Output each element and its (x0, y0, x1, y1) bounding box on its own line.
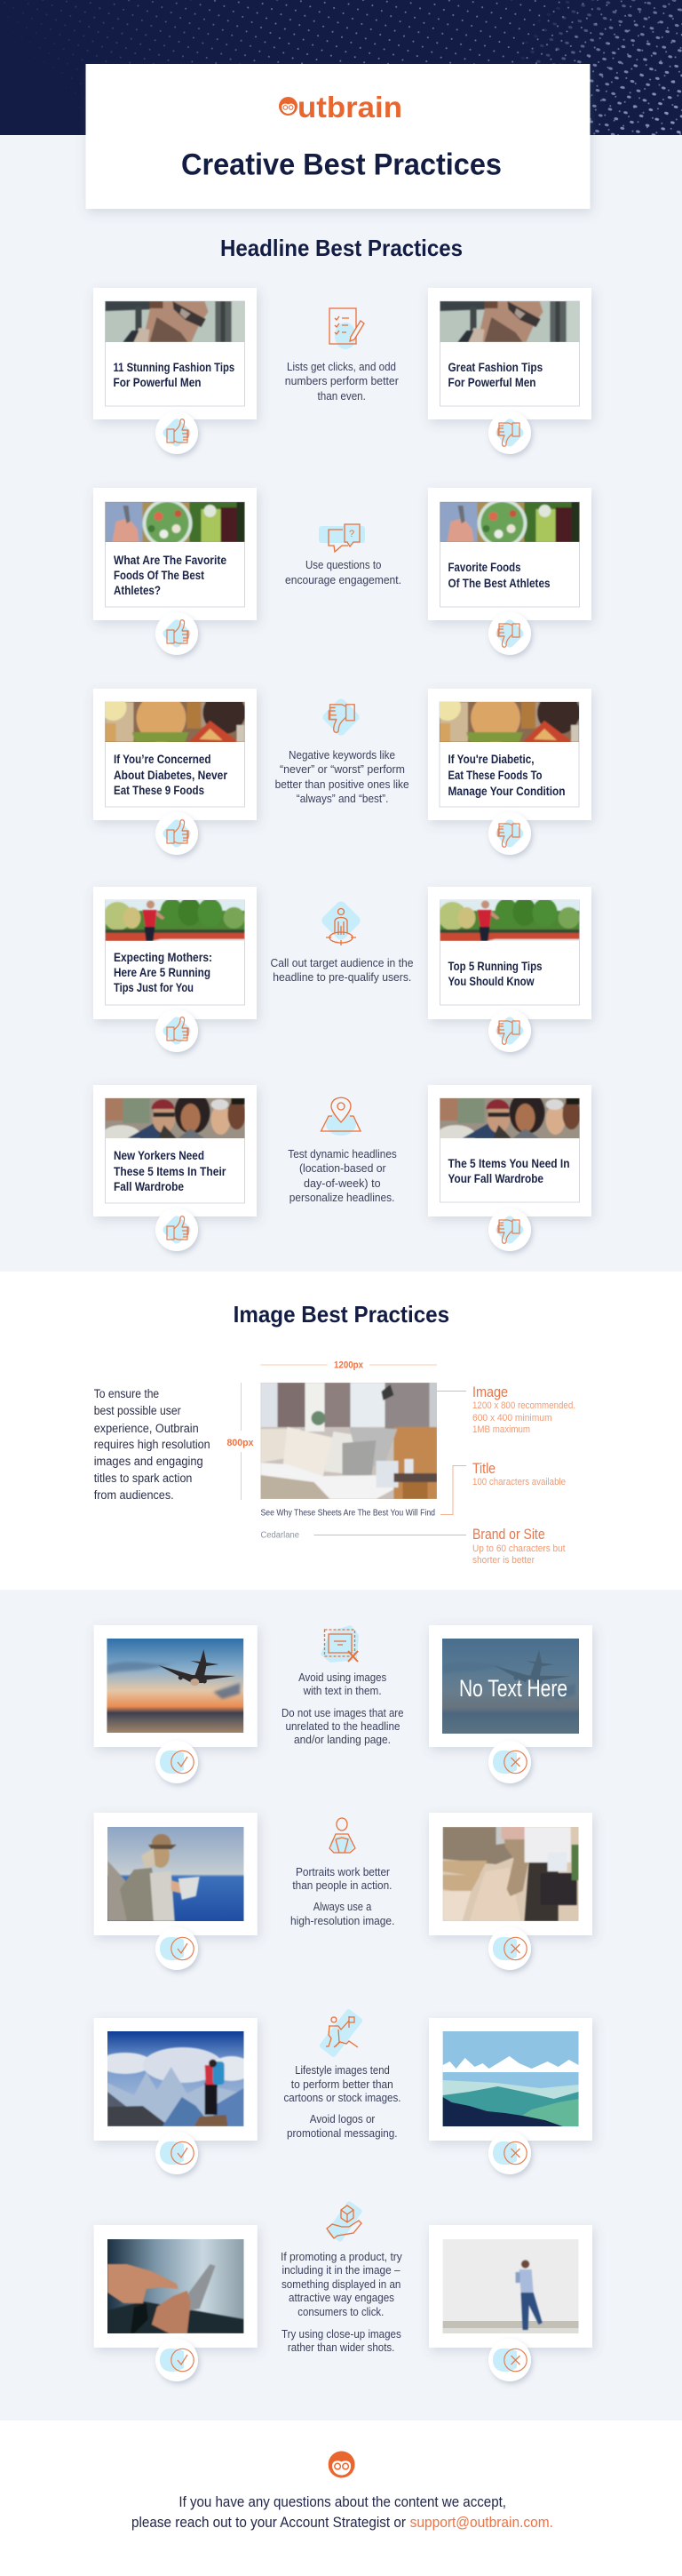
intro text: titles to spark action (94, 1471, 192, 1485)
card: good headline (93, 689, 257, 820)
tip text: (location-based or (299, 1162, 386, 1175)
icon: map pin (321, 1097, 361, 1136)
card: good headline: What Are The Favorite (114, 553, 226, 567)
icon: thumbs up (155, 411, 198, 454)
card: good headline: Expecting Mothers: (114, 950, 212, 964)
card: good headline (93, 1085, 257, 1216)
tip text: day-of-week) to (304, 1177, 381, 1190)
tip text: Lifestyle images tend (295, 2064, 390, 2077)
icon: thumbs up (155, 812, 198, 855)
intro text: images and engaging (94, 1455, 203, 1468)
tip text: Use questions to (305, 559, 381, 571)
card: good headline: New Yorkers Need (114, 1148, 204, 1162)
tip text (281, 2251, 403, 2354)
tip text: Call out target audience in the (270, 957, 414, 969)
footer text (131, 2493, 553, 2531)
panel: image row 1 (94, 1625, 592, 1783)
icon: check (155, 2339, 198, 2381)
heading: headline best practices: Headline Best Practices (220, 235, 463, 261)
intro text: requires high resolution (94, 1438, 210, 1451)
tip text: encourage engagement. (285, 574, 401, 586)
panel: image row 2 (94, 1813, 592, 1970)
card: good image (94, 1625, 258, 1747)
card: weak headline: Great Fashion Tips (448, 360, 543, 374)
card: good image (94, 2225, 258, 2348)
tip text: to perform better than (291, 2078, 393, 2091)
icon: thumbs down (488, 812, 531, 855)
tip text: unrelated to the headline (286, 1720, 400, 1733)
card: good headline: These 5 Items In Their (114, 1164, 226, 1178)
intro text: best possible user (94, 1404, 181, 1417)
panel: headline row 5 (93, 1085, 591, 1251)
caption: title: See Why These Sheets Are The Best You Will Find (261, 1509, 435, 1518)
panel: headline row 3 (93, 689, 591, 855)
tip text (290, 1866, 394, 1927)
title card (85, 64, 590, 209)
panel: headline row 4 (93, 887, 591, 1052)
card: bad image with text: No Text Here (459, 1675, 567, 1702)
tip text: personalize headlines. (289, 1192, 394, 1204)
tip text: attractive way engages (289, 2292, 394, 2304)
caption: brand: Cedarlane (261, 1530, 299, 1541)
card: good headline: Eat These 9 Foods (114, 783, 204, 797)
card: bad image wide shot (429, 2225, 592, 2348)
label: image: 1200 x 800 recommended. (472, 1400, 575, 1411)
card: good image (94, 1813, 258, 1935)
card: good headline: Fall Wardrobe (114, 1179, 184, 1193)
card: weak headline: If You're Diabetic, (448, 752, 535, 766)
icon: thumbs up (155, 1009, 198, 1052)
tip text (288, 1148, 397, 1204)
footer (0, 2420, 682, 2576)
card: weak headline (428, 887, 591, 1019)
card: good headline: 11 Stunning Fashion Tips (114, 360, 234, 374)
tip text: with text in them. (303, 1685, 382, 1697)
icon: checklist (329, 308, 364, 349)
label: image: 1MB maximum (472, 1424, 530, 1435)
dimension: 800px (227, 1383, 254, 1500)
card: weak headline: Manage Your Condition (448, 784, 565, 798)
tip text: numbers perform better (285, 375, 399, 387)
card: good headline: Foods Of The Best (114, 568, 204, 582)
card: weak headline: Your Fall Wardrobe (448, 1171, 543, 1185)
tip text: Negative keywords like (289, 749, 395, 762)
panel: headline row 2 (93, 488, 591, 655)
tip text: cartoons or stock images. (284, 2092, 401, 2104)
icon: check (155, 2132, 198, 2174)
tip text: than even. (318, 390, 366, 403)
icon: check (155, 1741, 198, 1783)
icon: thumbs down (488, 411, 531, 454)
card: good image (94, 2018, 258, 2141)
card: weak headline: The 5 Items You Need In (448, 1156, 570, 1170)
label: image: 600 x 400 minimum (472, 1413, 552, 1424)
tip text: better than positive ones like (275, 778, 409, 791)
card: good headline: Athletes? (114, 583, 161, 597)
label: brand or site: Up to 60 characters but (472, 1543, 565, 1554)
label: title (472, 1460, 566, 1487)
card: good headline: Here Are 5 Running (114, 965, 210, 979)
card: weak headline: Of The Best Athletes (448, 576, 551, 590)
tip text: Always use a (313, 1901, 371, 1913)
icon: thumbs up (155, 612, 198, 655)
photo: bedroom (261, 1383, 437, 1499)
tip text (285, 361, 399, 403)
icon: thumbs down (488, 612, 531, 655)
logo: Outbrain: utbrain (297, 91, 402, 124)
label: title: Title (472, 1460, 496, 1477)
footer text: If you have any questions about the content we accept, (178, 2493, 506, 2510)
card: weak headline: You Should Know (448, 974, 535, 988)
icon: thumbs down (488, 1208, 531, 1251)
icon: cross (488, 2132, 531, 2174)
panel: image specs section (0, 1272, 682, 1590)
intro text: experience, Outbrain (94, 1422, 199, 1435)
panel: image row 3 (94, 2008, 592, 2174)
tip text (275, 749, 409, 805)
icon: target audience (320, 899, 362, 945)
title: Creative Best Practices (181, 148, 502, 181)
card: good headline: If You’re Concerned (114, 752, 211, 766)
intro text (94, 1387, 210, 1502)
tip text (285, 559, 401, 586)
intro text: from audiences. (94, 1488, 174, 1502)
tip text: Lists get clicks, and odd (287, 361, 396, 373)
icon: Outbrain head (329, 2451, 355, 2477)
header band with dot pattern (0, 0, 682, 135)
dimension: 1200px: 1200px (334, 1360, 364, 1370)
icon: hiker with flag (319, 2008, 363, 2058)
card: good headline: For Powerful Men (114, 375, 201, 389)
tip text: “never” or “worst” perform (280, 763, 405, 776)
label: image: Image (472, 1384, 508, 1400)
tip text: Test dynamic headlines (288, 1148, 397, 1160)
card: good headline: Tips Just for You (114, 980, 194, 994)
icon: cross (488, 2339, 531, 2381)
card: good headline (93, 288, 257, 419)
panel: image row 4 (94, 2200, 592, 2381)
tip text: something displayed in an (282, 2278, 400, 2291)
card: weak headline: Eat These Foods To (448, 768, 542, 782)
card: bad image cartoon (429, 2018, 592, 2141)
tip text: Avoid using images (298, 1671, 386, 1684)
icon: question bubbles: ? (349, 529, 354, 539)
icon: thumbs down with diamond (321, 697, 361, 738)
tip text (270, 957, 414, 984)
leader lines (314, 1392, 466, 1535)
icon: thumbs up (155, 1208, 198, 1251)
tip text (284, 2064, 401, 2140)
tip text: headline to pre-qualify users. (273, 971, 411, 984)
card: weak headline: Top 5 Running Tips (448, 959, 543, 973)
card: weak headline (428, 1085, 591, 1216)
icon: portrait (329, 1818, 355, 1854)
tip text (282, 1671, 404, 1746)
card: good headline (93, 488, 257, 620)
label: brand or site: Brand or Site (472, 1526, 545, 1543)
card: weak headline (428, 288, 591, 419)
tip text: If promoting a product, try (281, 2251, 403, 2263)
tip text: including it in the image – (282, 2264, 400, 2277)
card: bad image with text (429, 1625, 592, 1747)
tip text: Avoid logos or (310, 2113, 375, 2125)
tip text: than people in action. (292, 1879, 392, 1892)
card: good headline: About Diabetes, Never (114, 768, 227, 782)
card: weak headline (428, 488, 591, 620)
icon: check (155, 1927, 198, 1970)
label: brand or site (472, 1526, 565, 1566)
dimension: 800px: 800px (227, 1438, 254, 1448)
card: good headline (93, 887, 257, 1019)
icon: cross (488, 1741, 531, 1783)
card: weak headline: For Powerful Men (448, 375, 536, 389)
intro text: To ensure the (94, 1387, 159, 1400)
tip text: and/or landing page. (294, 1734, 391, 1746)
icon: cross (488, 1927, 531, 1970)
label: title: 100 characters available (472, 1477, 566, 1487)
footer text: support@outbrain.com. (410, 2514, 553, 2531)
card: weak headline (428, 689, 591, 820)
icon: thumbs down (488, 1009, 531, 1052)
card: bad image (429, 1813, 592, 1935)
label: image (472, 1384, 575, 1435)
icon: hand holding product (326, 2200, 363, 2243)
panel: headline row 1 (93, 288, 591, 454)
label: brand or site: shorter is better (472, 1555, 535, 1566)
icon: question bubbles (319, 524, 365, 552)
footer text: please reach out to your Account Strategist or (131, 2514, 406, 2531)
tip text: Try using close-up images (282, 2328, 401, 2341)
tip text: Portraits work better (296, 1866, 390, 1878)
heading: image best practices: Image Best Practices (234, 1301, 449, 1328)
tip text: consumers to click. (297, 2306, 384, 2318)
tip text: high-resolution image. (290, 1915, 394, 1927)
icon: image with text crossed (321, 1625, 359, 1663)
tip text: “always” and “best”. (297, 793, 388, 805)
tip text: rather than wider shots. (288, 2341, 394, 2354)
tip text: promotional messaging. (287, 2127, 398, 2140)
card: weak headline: Favorite Foods (448, 560, 521, 574)
tip text: Do not use images that are (282, 1707, 404, 1719)
